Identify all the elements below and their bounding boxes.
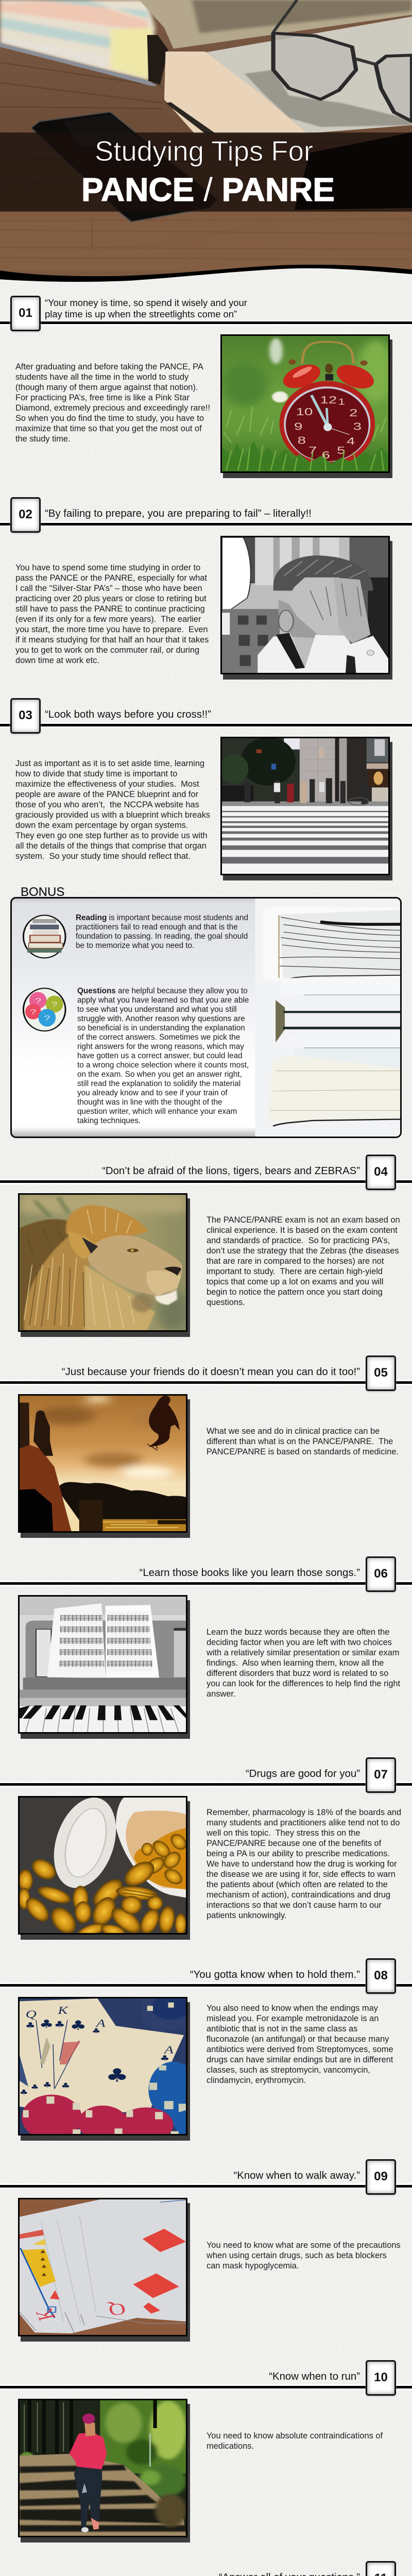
photo: poker cards and chips: ♣ [25,2021,36,2030]
photo: alarm clock in grass: 7 [308,445,317,456]
number badge 06 [366,1556,396,1592]
title: PANCE / PANRE: PANCE / PANRE [81,171,335,208]
panel: bonus study tips [10,897,402,1138]
heading tip 07: “Drugs are good for you” [246,1768,360,1780]
heading tip 02: “By failing to prepare, you are preparing to fail” – literally!! [45,508,312,519]
photo: fanned playing cards with diamonds: ♣ [40,2257,46,2262]
title: Studying Tips For: Studying Tips For [95,135,313,167]
photo: fanned playing cards with diamonds: ♣ [41,2264,47,2269]
number badge 08: 08 [374,1969,388,1982]
number badge 04: 04 [374,1165,388,1179]
photo: poker cards and chips: ♣ [30,2083,39,2091]
number badge 07: 07 [374,1768,388,1782]
number badge 09 [366,2159,396,2195]
photo: woman jogging on a forest path [18,2399,187,2537]
heading tip 09: “Know when to walk away.” [233,2170,360,2181]
body text tip 06: Learn the buzz words because they are often the deciding factor when you are left with two choices with a relatively similar presentation or similar exam findings. Also when learning them, know all the different disorders that buzz word is related to so you can look for the differences to help find the right answer. [207,1628,400,1699]
text: questions tip: Questions are helpful because they allow you to apply what you have learned so that you are able to see what you understand and what you still struggle with. Another reason why questions are so beneficial is in understanding the explanation of the correct answers. Sometimes we pick the right answers for the wrong reasons, which may have gotten us a correct answer, but could lead to a wrong choice selection where it counts most, on the exam. So when you get an answer right, still read the explanation to solidify the material you already know and to see if your train of thought was in line with the thought of the question writer, which will enhance your exam taking techniques. [77,987,249,1125]
photo: alarm clock in grass: 8 [298,435,306,446]
photo: poker cards and chips: ♣ [54,2019,65,2029]
photo: poker cards and chips: K [57,2005,69,2016]
body text tip 04: The PANCE/PANRE exam is not an exam based on clinical experience. It is based on the exam content and standards of practice. So for practicing PA’s, don’t use the strategy that the Zebras (the diseases that are rare in compared to the horses) are not important to study. There are certain high-yield topics that come up a lot on exams and you will begin to notice the pattern once you start doing questions. [207,1215,400,1307]
photo: alarm clock in grass [220,334,390,473]
photo: poker cards and chips: Q [26,2008,37,2020]
panel: tip 02 [0,497,412,680]
photo: poker cards and chips: ♣ [70,2018,87,2033]
heading tip 04: “Don’t be afraid of the lions, tigers, bears and ZEBRAS” [102,1165,360,1177]
number badge 10: 10 [374,2370,388,2384]
photo: alarm clock in grass: 12 [320,394,337,406]
number badge 03: 03 [19,708,32,722]
body text tip 09: You need to know what are some of the precautions when using certain drugs, such as beta blockers can mask hypoglycemia. [207,2241,401,2270]
panel: tip 07 [0,1757,412,1940]
photo: pedestrians at a crosswalk [220,737,390,875]
photo: poker cards and chips: ♣ [61,2082,70,2090]
photo: alarm clock in grass: 9 [294,421,302,433]
number badge 06: 06 [374,1567,388,1581]
panel: tip 08 [0,1958,412,2141]
heading tip 10: “Know when to run” [269,2371,360,2382]
heading tip 01: “Your money is time, so spend it wisely and your play time is up when the streetlights come on” [45,297,247,319]
panel: tip 03 [0,698,412,880]
body text tip 10: You need to know absolute contraindications of medications. [207,2431,383,2451]
body text tip 08: You also need to know when the endings may mislead you. For example metronidazole is an antibiotic that is not in the same class as fluconazole (an antifungal) or that because many antibiotics were derived from Streptomyces, some drugs can have similar endings but are in different classes, such as streptomycin, vancomycin, clindamycin, erythromycin. [207,2004,393,2085]
photo: poker cards and chips: ♣ [92,2027,100,2035]
icon: question bubbles: ? [30,1007,36,1016]
number badge 01: 01 [19,306,32,320]
body text tip 03: Just as important as it is to set aside time, learning how to divide that study time is important to maximize the effectiveness of your studies. Most people are aware of the PANCE blueprint and for those of you who aren’t, the NCCPA website has graciously provided us with a blueprint which breaks down the exam percentage by organ systems. They even go one step further as to provide us with all the details of the things that comprise that organ system. So your study time should reflect that. [15,759,210,861]
photo: poker cards and chips: A [95,2018,106,2029]
photo: friends jumping off a pier at sunset [18,1394,187,1533]
number badge 05: 05 [374,1366,388,1380]
number badge 03 [10,698,41,734]
photo: poker cards and chips: ♣ [43,2081,52,2089]
number badge 07 [366,1757,396,1793]
photo: alarm clock in grass: 2 [349,407,357,419]
panel: tip 06 [0,1556,412,1739]
photo: fanned playing cards with diamonds [18,2198,187,2336]
panel: tip 01 [0,296,412,478]
number badge 01 [10,296,41,331]
photo: alarm clock in grass: 1 [338,397,345,407]
heading tip 05: “Just because your friends do it doesn’t mean you can do it too!” [62,1366,360,1378]
body text tip 01: After graduating and before taking the PANCE, PA students have all the time in the world to study (though many of them argue against that notion). For practicing PA’s, free time is like a Pink Star Diamond, extremely precious and exceedingly rare!! So when you do find the time to study, you have to maximize that time so that you get the most out of the study time. [15,362,210,444]
photo: poker cards and chips: ♣ [106,2065,129,2087]
photo: alarm clock in grass: 3 [353,421,362,433]
panel: tip 04 [0,1155,412,1337]
icon: question bubbles [23,988,65,1031]
panel: tip 10 [0,2360,412,2543]
number badge 10 [366,2360,396,2396]
number badge 02: 02 [19,507,32,521]
number badge 02 [10,497,41,533]
photo: boy covering his face [220,536,390,674]
heading tip 03: “Look both ways before you cross!!” [45,709,211,720]
photo: poker cards and chips: A [163,2044,174,2056]
photo: fanned playing cards with diamonds: ♣ [40,2250,46,2255]
photo: piano with sheet music [18,1595,187,1734]
photo: fanned playing cards with diamonds: ♣ [41,2273,47,2278]
photo: poker cards and chips [18,1997,187,2136]
number badge 08 [366,1958,396,1994]
photo: alarm clock in grass: 10 [296,406,313,418]
panel: tip 09 [0,2159,412,2342]
photo: poker cards and chips: ♣ [160,2054,169,2063]
number badge 11 [366,2561,396,2576]
photo: alarm clock in grass: 4 [347,435,355,447]
icon: question bubbles: ? [52,1000,58,1009]
icon: question bubbles: ? [44,1013,50,1022]
photo: fanned playing cards with diamonds: Q [107,2299,128,2319]
photo: stack of books [255,899,400,1137]
photo: poker cards and chips: ♣ [39,2018,54,2031]
photo: lion in profile [18,1193,187,1332]
body text tip 05: What we see and do in clinical practice can be different than what is on the PANCE/PANRE. The PANCE/PANRE is based on standards of medicine. [207,1427,399,1456]
photo: alarm clock in grass: 6 [322,449,330,461]
body text tip 07: Remember, pharmacology is 18% of the boards and many students and practitioners alike tend not to do well on this topic. They stress this on the PANCE/PANRE because one of the benefits of being a PA is our ability to prescribe medications. We have to understand how the drug is working for the disease we are using it for, side effects to warn the patients about (which often are related to the mechanism of action), contraindications and drug interactions so that we don’t cause harm to our patients unknowingly. [207,1808,401,1920]
number badge 09: 09 [374,2170,388,2183]
panel: tip 05 [0,1355,412,1538]
number badge 04 [366,1155,396,1190]
photo: alarm clock in grass: 5 [337,445,346,456]
icon: question bubbles: ? [35,996,41,1005]
heading tip 06: “Learn those books like you learn those songs.” [140,1567,360,1579]
body text tip 02: You have to spend some time studying in order to pass the PANCE or the PANRE, especially for what I call the “Silver-Star PA’s” – those who have been practicing over 20 plus years or close to retiring but still have to pass the PANRE to continue practicing (even if its only for a few more years). The earlier you start, the more time you have to prepare. Even if it means studying for that half an hour that it takes you to get to work on the commuter rail, or during down time at work etc. [15,563,209,665]
photo: fanned playing cards with diamonds: K [30,2307,61,2323]
icon: book stack [23,915,65,958]
text: reading tip: Reading is important because most students and practitioners fail to read enough and that is the foundation to passing. In reading, the goal should be to memorize what you need to. [76,913,248,950]
number badge 05 [366,1355,396,1391]
header photo with title banner [0,0,412,282]
heading tip 08: “You gotta know when to hold them.” [190,1969,360,1980]
panel: tip 11 [219,2561,397,2576]
photo: capsules spilling from a bottle [18,1796,187,1935]
